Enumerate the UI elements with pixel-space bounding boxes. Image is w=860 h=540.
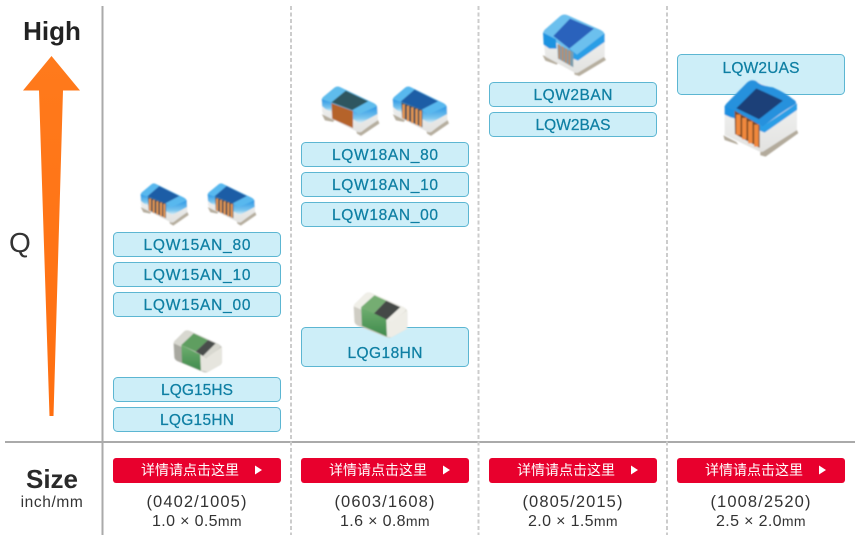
chip: LQG15HS [114, 378, 280, 402]
size label: 0603/1608: (0603/1608) [334, 493, 436, 511]
size label: 0805/2015: (0805/2015) [522, 493, 624, 511]
chip: LQW18AN_80: LQW18AN_80 [332, 147, 438, 164]
size label: 0402/1005: (0402/1005) [146, 493, 248, 511]
size label: 1008/2520: (1008/2520) [710, 493, 812, 511]
axis unit: inch/mm: inch/mm [21, 494, 83, 511]
chip: LQW2UAS: LQW2UAS [722, 60, 800, 77]
chip: LQG15HS: LQG15HS [161, 382, 233, 399]
icon: LQW18AN_10 inductor [393, 86, 449, 136]
icon: LQW2BA inductor [543, 14, 606, 76]
chip: LQW2BAS [490, 112, 656, 136]
chip: LQW2BAN: LQW2BAN [534, 87, 612, 104]
button: details: 详情请点击这里 [705, 460, 803, 480]
chip: LQW15AN_10: LQW15AN_10 [144, 267, 251, 284]
icon: Q axis arrow [23, 56, 80, 416]
button: details [489, 458, 657, 483]
button: details: 详情请点击这里 [141, 460, 239, 480]
panel: 0805 size column [489, 14, 657, 530]
size label: 0603/1608 [334, 493, 436, 530]
button: details [301, 458, 469, 483]
chip: LQW15AN_00 [114, 292, 280, 316]
chip: LQG15HN: LQG15HN [160, 412, 234, 429]
icon: LQW15AN_80 inductor [141, 183, 189, 226]
button: details [113, 458, 281, 483]
chip: LQW18AN_00 [302, 202, 468, 226]
vertical axis line [102, 6, 104, 535]
chip: LQW2BAS: LQW2BAS [536, 117, 610, 134]
horizontal axis line [5, 441, 855, 443]
size label: 1008/2520: 2.5 × 2.0mm [716, 513, 806, 530]
chip: LQW15AN_80 [114, 232, 280, 256]
chip: LQG18HN: LQG18HN [348, 345, 422, 362]
button: details [677, 458, 845, 483]
size label: 0805/2015 [522, 493, 624, 530]
size label: 0402/1005: 1.0 × 0.5mm [152, 513, 242, 530]
chip: LQW15AN_00: LQW15AN_00 [144, 297, 251, 314]
chip: LQW2UAS [678, 54, 844, 94]
button: details: 详情请点击这里 [517, 460, 615, 480]
icon: LQW15AN_10 inductor [208, 183, 256, 226]
panel: 1008 size column [677, 54, 845, 530]
panel: 0402 size column [113, 183, 281, 530]
heading: Size: Size [26, 464, 78, 494]
chip: LQW2BAN [490, 82, 656, 106]
icon: LQG18 ceramic inductor [354, 292, 407, 338]
chip: LQW15AN_10 [114, 262, 280, 286]
icon: LQW18AN_80 inductor [322, 86, 379, 136]
chip: LQW18AN_10: LQW18AN_10 [332, 177, 438, 194]
chip: LQG15HN [114, 408, 280, 432]
axis label: Q: Q [9, 227, 31, 258]
chip: LQW15AN_80: LQW15AN_80 [144, 237, 251, 254]
button: details: 详情请点击这里 [329, 460, 427, 480]
icon: LQG15 ceramic inductor [174, 330, 222, 372]
icon: LQW2UAS inductor [723, 80, 798, 157]
size label: 0402/1005 [146, 493, 248, 530]
size label: 0603/1608: 1.6 × 0.8mm [340, 513, 430, 530]
size label: 0805/2015: 2.0 × 1.5mm [528, 513, 618, 530]
panel: 0603 size column [301, 86, 469, 530]
heading: High: High [23, 16, 81, 46]
chip: LQW18AN_10 [302, 172, 468, 196]
chip: LQG18HN [302, 328, 468, 366]
chip: LQW18AN_00: LQW18AN_00 [332, 207, 438, 224]
size label: 1008/2520 [710, 493, 812, 530]
chip: LQW18AN_80 [302, 142, 468, 166]
